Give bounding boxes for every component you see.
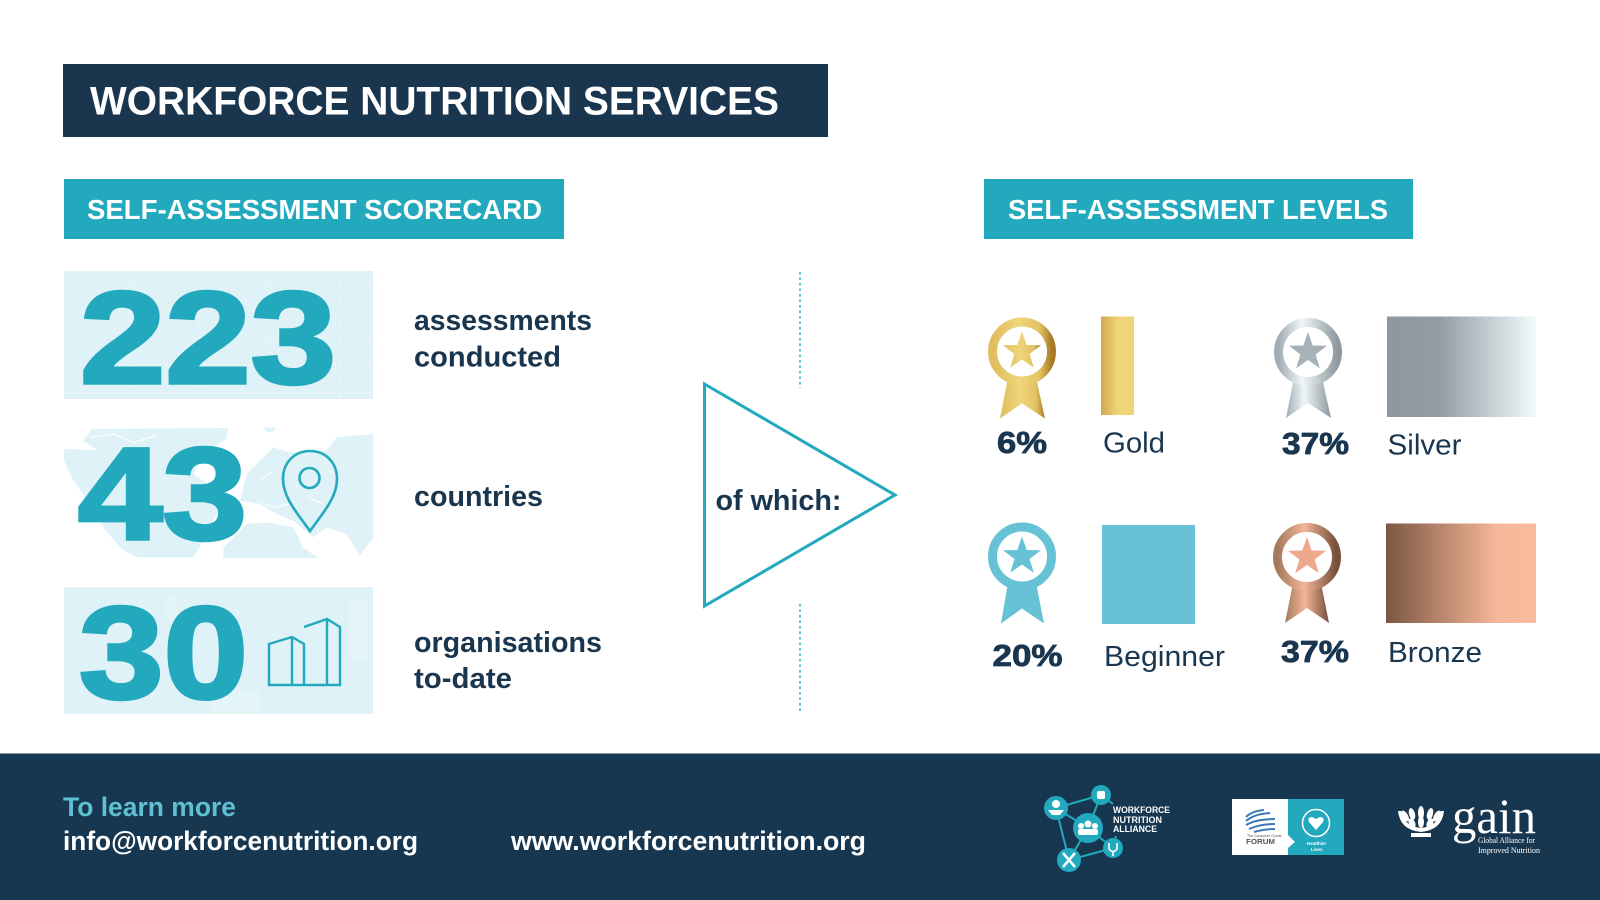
logo: consumer goods forum: FORUM: [1246, 839, 1275, 846]
number: 30: 30: [79, 579, 248, 726]
icon: beginner medal: [992, 527, 1052, 624]
label: silver: Silver: [1388, 430, 1462, 462]
logo: gain: [1398, 788, 1541, 855]
logo: gain: Improved Nutrition: [1478, 845, 1541, 855]
logo: workforce nutrition alliance: ALLIANCE: [1113, 824, 1157, 835]
logo: consumer goods forum: [1232, 799, 1344, 855]
icon: gold medal: [992, 322, 1052, 418]
logo: gain: gain: [1452, 788, 1536, 844]
panel: assessments stat: [64, 264, 373, 411]
heading: self-assessment scorecard: SELF-ASSESSMENT SCORECARD: [87, 194, 542, 225]
icon: silver medal: [1278, 322, 1338, 418]
divider: dotted line top: [799, 272, 801, 388]
level: bronze: [1278, 524, 1536, 669]
world map background: [64, 427, 373, 558]
level: gold: [992, 316, 1165, 460]
divider: dotted line bottom: [799, 604, 801, 714]
title: WORKFORCE NUTRITION SERVICES: [90, 80, 779, 124]
icon: location pin: [283, 451, 337, 531]
bar: gold: [1101, 316, 1134, 415]
text: email: info@workforcenutrition.org: [63, 826, 418, 856]
logo: workforce nutrition alliance: NUTRITION: [1113, 815, 1162, 826]
value: 37%: 37%: [1282, 426, 1349, 461]
text: organisations to-date: organisations: [414, 627, 602, 659]
logo: consumer goods forum: The Consumer Goods: [1247, 834, 1282, 838]
title: [63, 64, 828, 137]
bar: bronze: [1386, 524, 1536, 623]
label: bronze: Bronze: [1388, 637, 1482, 669]
value: 20%: 20%: [992, 638, 1062, 673]
text: website: www.workforcenutrition.org: [510, 826, 866, 856]
icon: bronze medal: [1278, 528, 1336, 623]
panel: organisations stat: [64, 579, 373, 726]
icon: buildings: [269, 619, 340, 685]
number: 43: 43: [78, 420, 247, 567]
text: organisations to-date: to-date: [414, 663, 512, 695]
logo: consumer goods forum: Lives: [1311, 847, 1323, 852]
text: assessments conducted: [414, 305, 592, 374]
label: gold: Gold: [1103, 428, 1165, 460]
text: countries: countries: [414, 481, 543, 513]
value: 6%: 6%: [997, 425, 1047, 460]
value: 37%: 37%: [1281, 634, 1349, 669]
arrow: of which triangle: [704, 384, 895, 606]
level: silver: [1278, 316, 1536, 462]
heading: self-assessment scorecard: [64, 179, 564, 239]
label: beginner: Beginner: [1104, 641, 1225, 673]
text: to learn more: To learn more: [63, 792, 236, 822]
heading: self-assessment levels: SELF-ASSESSMENT LEVELS: [1008, 194, 1388, 225]
bar: beginner: [1102, 525, 1195, 624]
logo: consumer goods forum: Healthier: [1307, 841, 1327, 846]
logo: workforce nutrition alliance: WORKFORCE: [1113, 805, 1170, 816]
arrow: of which triangle: of which:: [716, 485, 842, 517]
text: organisations to-date: [414, 627, 602, 695]
footer: [0, 754, 1600, 900]
text: assessments conducted: conducted: [414, 342, 561, 374]
text: assessments conducted: assessments: [414, 305, 592, 337]
logo: gain: Global Alliance for: [1478, 835, 1535, 845]
number: 223: 223: [80, 264, 336, 411]
panel: countries stat: [64, 420, 373, 567]
level: beginner: [992, 525, 1225, 673]
heading: self-assessment levels: [984, 179, 1413, 239]
logo: workforce nutrition alliance: [1044, 785, 1170, 872]
bar: silver: [1387, 316, 1536, 417]
